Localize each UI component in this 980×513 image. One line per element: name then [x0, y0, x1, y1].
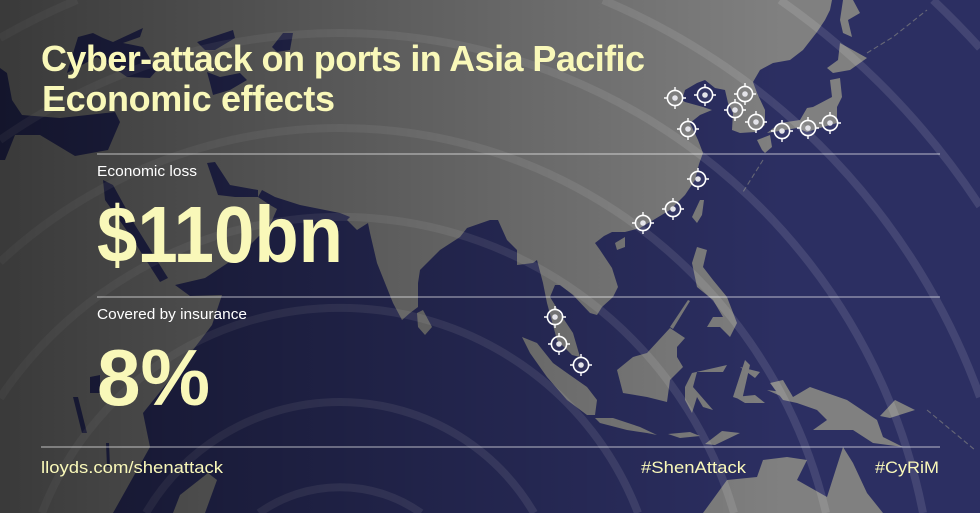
port target markers — [544, 83, 841, 376]
New Guinea — [770, 380, 903, 447]
Sri Lanka — [417, 310, 432, 335]
label: economic loss: Economic loss — [97, 164, 197, 180]
Sumatra — [522, 337, 597, 415]
Hainan — [615, 237, 625, 250]
island chains — [743, 10, 975, 450]
label: covered by insurance: Covered by insurance — [97, 307, 247, 323]
Borneo — [617, 328, 685, 402]
Kyushu — [757, 135, 772, 153]
Taiwan — [692, 200, 704, 223]
Philippines — [692, 247, 737, 337]
Sakhalin — [840, 0, 860, 37]
figure: $110bn: $110bn — [97, 190, 343, 279]
Sulawesi — [685, 365, 727, 413]
title: Cyber-attack on ports in Asia Pacific — [41, 38, 645, 79]
title: Economic effects — [42, 78, 335, 119]
Hokkaido — [827, 43, 867, 73]
Australia — [703, 447, 883, 513]
small Pacific and Maluku islands — [733, 360, 915, 418]
Java and lesser islands — [595, 418, 740, 445]
divider rules — [41, 154, 940, 447]
figure: 8%: 8% — [97, 333, 210, 422]
Madagascar — [173, 473, 217, 513]
footer link: lloyds.com/shenattack — [41, 458, 224, 477]
hashtag: ShenAttack: #ShenAttack — [641, 458, 747, 477]
title — [41, 38, 645, 119]
inland and enclosed seas — [0, 28, 293, 467]
hashtag: CyRiM: #CyRiM — [875, 458, 939, 477]
Palawan — [670, 300, 690, 329]
Honshu and Shikoku — [767, 78, 842, 133]
